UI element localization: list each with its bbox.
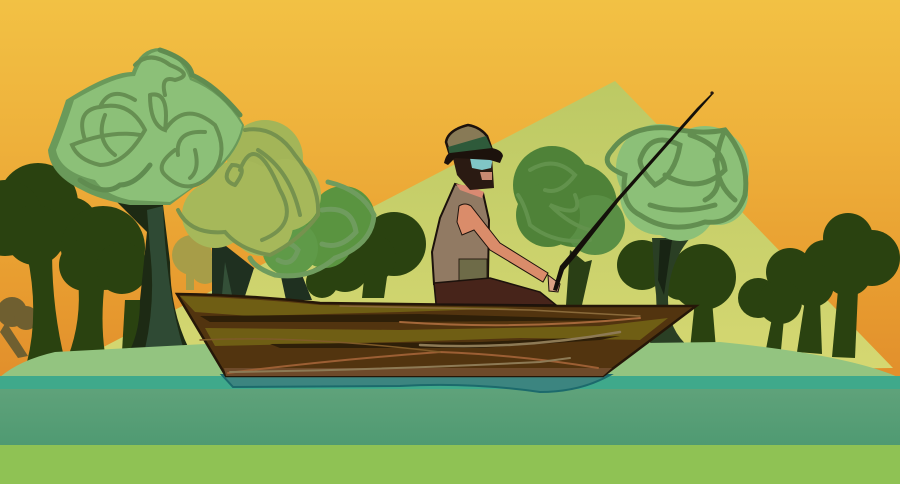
fisherman: hand: [548, 275, 560, 292]
fisherman: collar: [456, 184, 484, 198]
fisherman: trousers: [434, 278, 556, 305]
dark trees: far left group: [0, 163, 148, 362]
ground: light green mound: [0, 342, 900, 395]
boat: dark plank shadows: [200, 314, 640, 348]
fisherman: fishing rod: [553, 92, 714, 291]
trees: far right dark group: [738, 213, 900, 358]
boat: [177, 294, 696, 392]
background: pale green triangular hill: [40, 81, 893, 380]
fisherman: hat: [444, 125, 503, 165]
tree: olive crown: [178, 120, 321, 256]
trees: right of centre dark crowns: [617, 240, 736, 349]
tree: olive trunk: [212, 235, 254, 296]
tree: dark crown behind boat: [280, 212, 426, 300]
fisherman: goggles: [470, 157, 493, 170]
boat: wooden hull: [177, 294, 696, 376]
fisherman: rod tip: [710, 91, 714, 95]
fisherman: pouch: [459, 259, 487, 281]
tree: large light green, trunk: [115, 200, 189, 350]
tree: right light green trunk: [648, 238, 690, 348]
boat: submerged hull: [222, 375, 610, 392]
tree: right light green crown with scribbles: [607, 124, 749, 241]
fisherman: arm: [457, 204, 548, 282]
fisherman: [432, 91, 714, 305]
tree: mid green crown: [250, 182, 375, 276]
ground: bright green foreground strip: [0, 445, 900, 484]
distant trees: faded brown and olive: [0, 235, 219, 358]
water: main green water: [0, 389, 900, 446]
water: teal band at bank: [0, 376, 900, 392]
boat: lower reddish plank: [224, 368, 612, 376]
fisherman: vest: [432, 184, 489, 284]
fisherman: face: [480, 172, 492, 180]
tree: dark green crown with scribbles: [513, 146, 625, 305]
tree: large light green crown with scribbles: [48, 48, 244, 205]
boat: wood grain strands: [200, 306, 640, 373]
fisherman: hair and beard: [452, 154, 494, 190]
boat: olive planks: [180, 296, 668, 346]
